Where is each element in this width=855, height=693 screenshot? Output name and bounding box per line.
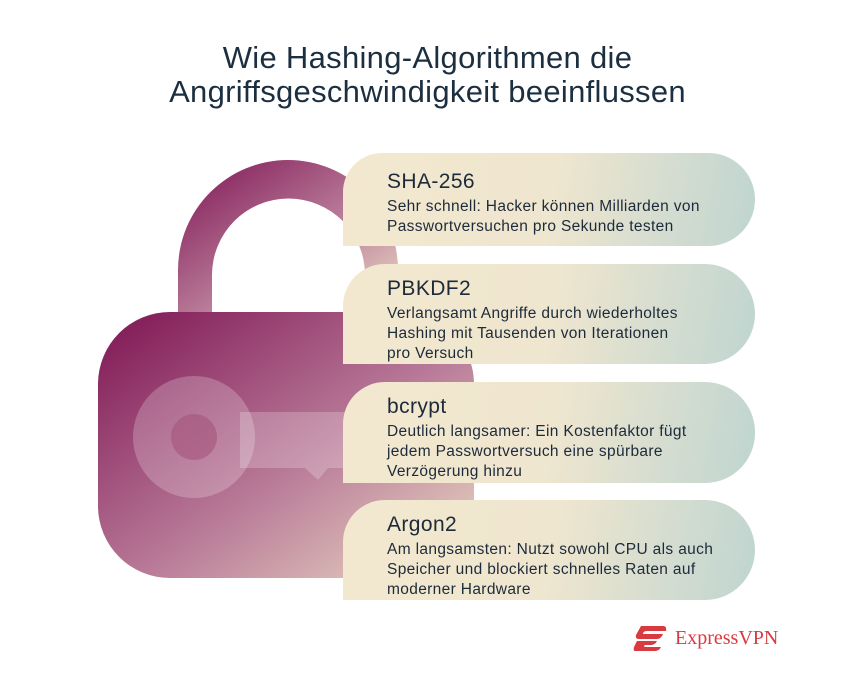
card: SHA-256: Passwortversuchen pro Sekunde testen — [387, 218, 674, 235]
card: PBKDF2: pro Versuch — [387, 345, 474, 362]
logo: ExpressVPN: ExpressVPN — [675, 627, 778, 649]
card: bcrypt — [343, 382, 755, 483]
card: PBKDF2: Hashing mit Tausenden von Iterationen — [387, 325, 669, 342]
logo: ExpressVPN — [634, 626, 778, 651]
card: PBKDF2 — [343, 264, 755, 364]
card: Argon2: Am langsamsten: Nutzt sowohl CPU als auch — [387, 541, 713, 558]
card: Argon2: Speicher und blockiert schnelles Raten auf — [387, 561, 696, 578]
card: bcrypt: Deutlich langsamer: Ein Kostenfaktor fügt — [387, 423, 687, 440]
card: SHA-256: SHA-256 — [387, 170, 475, 193]
card: Argon2: moderner Hardware — [387, 581, 531, 598]
card: PBKDF2: PBKDF2 — [387, 277, 471, 300]
card: bcrypt: bcrypt — [387, 395, 447, 418]
card: Argon2 — [343, 500, 755, 600]
title: Angriffsgeschwindigkeit beeinflussen — [169, 74, 686, 109]
title: Wie Hashing-Algorithmen die — [223, 40, 632, 75]
card: PBKDF2: Verlangsamt Angriffe durch wiederholtes — [387, 305, 678, 322]
card: SHA-256: Sehr schnell: Hacker können Milliarden von — [387, 198, 700, 215]
card: Argon2: Argon2 — [387, 513, 457, 536]
card: bcrypt: jedem Passwortversuch eine spürbare — [387, 443, 663, 460]
card: SHA-256 — [343, 153, 755, 246]
title — [169, 40, 686, 109]
card: bcrypt: Verzögerung hinzu — [387, 463, 522, 480]
